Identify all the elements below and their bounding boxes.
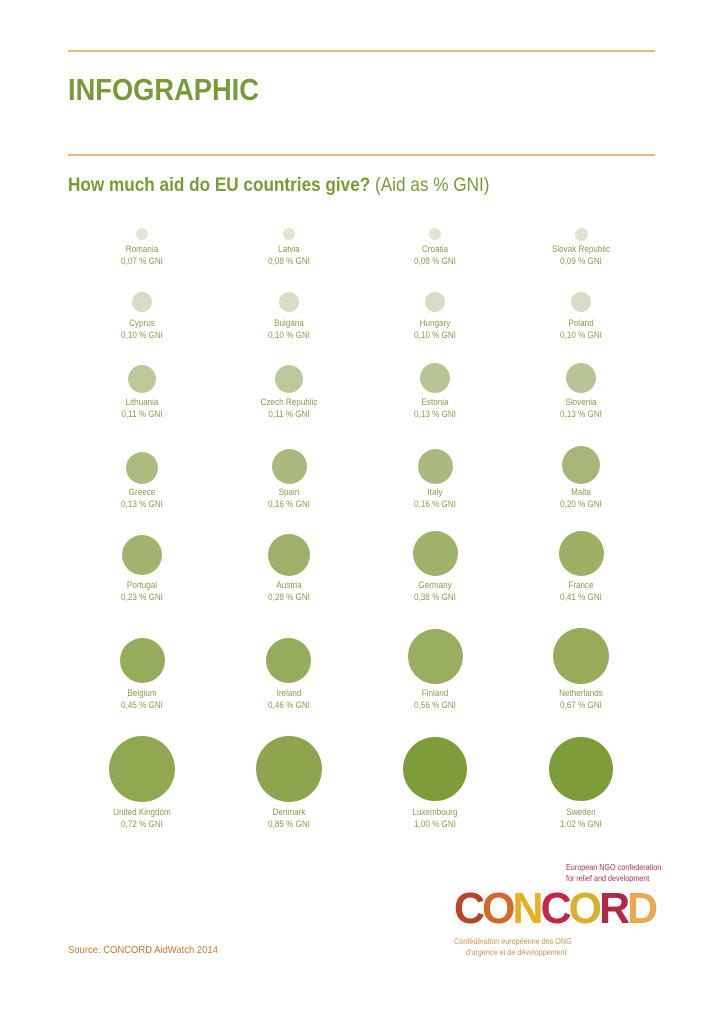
bubble chart: 0,16 % GNI bbox=[414, 499, 456, 509]
bubble chart: Germany bbox=[418, 580, 452, 590]
bubble chart: Netherlands bbox=[559, 688, 603, 698]
bubble chart: 1,00 % GNI bbox=[414, 819, 456, 829]
bubble chart: Malta bbox=[571, 487, 591, 497]
row 5 bbox=[121, 531, 604, 602]
bubble chart: Belgium bbox=[127, 688, 157, 698]
bubble chart: 0,13 % GNI bbox=[414, 409, 456, 419]
bubble chart: 0,28 % GNI bbox=[268, 592, 310, 602]
title: INFOGRAPHIC bbox=[68, 72, 259, 107]
bubble chart: 0,07 % GNI bbox=[121, 256, 163, 266]
bubble chart: Cyprus bbox=[129, 318, 155, 328]
bubble chart: Ireland bbox=[277, 688, 301, 698]
bubble chart: Greece bbox=[129, 487, 155, 497]
bubble chart: United Kingdom bbox=[113, 807, 171, 817]
logo: CONCORD: d'urgence et de développement bbox=[466, 948, 567, 957]
bubble chart: Romania bbox=[126, 244, 158, 254]
bubble chart: Slovak Republic bbox=[552, 244, 610, 254]
bubble chart: 0,67 % GNI bbox=[560, 700, 602, 710]
bubble chart: Luxembourg bbox=[412, 807, 458, 817]
bubble chart: France bbox=[568, 580, 594, 590]
row 3 bbox=[121, 363, 602, 419]
bubble chart: Austria bbox=[276, 580, 302, 590]
bubble chart bbox=[109, 228, 613, 829]
bubble chart: 0,72 % GNI bbox=[121, 819, 163, 829]
bubble chart: 0,56 % GNI bbox=[414, 700, 456, 710]
bubble chart: 0,38 % GNI bbox=[414, 592, 456, 602]
bubble chart: Bulgaria bbox=[274, 318, 304, 328]
row 7 bbox=[109, 736, 613, 829]
subtitle: How much aid do EU countries give? (Aid as % GNI) bbox=[68, 174, 489, 196]
bubble chart: Estonia bbox=[421, 397, 449, 407]
bubble chart: 0,09 % GNI bbox=[560, 256, 602, 266]
bubble chart: Latvia bbox=[278, 244, 300, 254]
bubble chart: 0,11 % GNI bbox=[268, 409, 310, 419]
bubble chart: Denmark bbox=[273, 807, 305, 817]
bubble chart: 1,02 % GNI bbox=[560, 819, 602, 829]
bubble chart: Italy bbox=[428, 487, 442, 497]
bubble chart: 0,13 % GNI bbox=[121, 499, 163, 509]
logo: CONCORD bbox=[454, 863, 661, 957]
bubble chart: 0,23 % GNI bbox=[121, 592, 163, 602]
bubble chart: 0,08 % GNI bbox=[414, 256, 456, 266]
bubble chart: 0,13 % GNI bbox=[560, 409, 602, 419]
row 6 bbox=[120, 628, 609, 710]
source: Source: CONCORD AidWatch 2014 bbox=[68, 944, 218, 956]
bubble chart: 0,41 % GNI bbox=[560, 592, 602, 602]
bubble chart: 0,11 % GNI bbox=[121, 409, 163, 419]
bubble chart: 0,10 % GNI bbox=[560, 330, 602, 340]
bubble chart: Slovenia bbox=[565, 397, 597, 407]
bubble chart: Croatia bbox=[422, 244, 448, 254]
row 2 bbox=[121, 292, 602, 340]
bubble chart: 0,16 % GNI bbox=[268, 499, 310, 509]
bubble chart: 0,10 % GNI bbox=[414, 330, 456, 340]
logo: CONCORD: Confédération européenne des ONG bbox=[454, 937, 572, 946]
bubble chart: Poland bbox=[568, 318, 594, 328]
logo: CONCORD: CONCORD bbox=[454, 884, 655, 933]
logo: CONCORD: European NGO confederation bbox=[566, 863, 661, 872]
bubble chart: Sweden bbox=[566, 807, 596, 817]
bubble chart: Finland bbox=[422, 688, 448, 698]
bubble chart: Hungary bbox=[420, 318, 450, 328]
bubble chart: Czech Republic bbox=[261, 397, 317, 407]
bubble chart: Portugal bbox=[127, 580, 157, 590]
bubble chart: 0,10 % GNI bbox=[121, 330, 163, 340]
bubble chart: 0,45 % GNI bbox=[121, 700, 163, 710]
bubble chart: Lithuania bbox=[126, 397, 158, 407]
bubble chart: 0,20 % GNI bbox=[560, 499, 602, 509]
bubble chart: Spain bbox=[279, 487, 299, 497]
bubble chart: 0,46 % GNI bbox=[268, 700, 310, 710]
row 1 bbox=[121, 228, 610, 266]
bubble chart: 0,10 % GNI bbox=[268, 330, 310, 340]
logo: CONCORD: for relief and development bbox=[566, 874, 649, 883]
bubble chart: 0,08 % GNI bbox=[268, 256, 310, 266]
row 4 bbox=[121, 446, 602, 509]
bubble chart: 0,85 % GNI bbox=[268, 819, 310, 829]
